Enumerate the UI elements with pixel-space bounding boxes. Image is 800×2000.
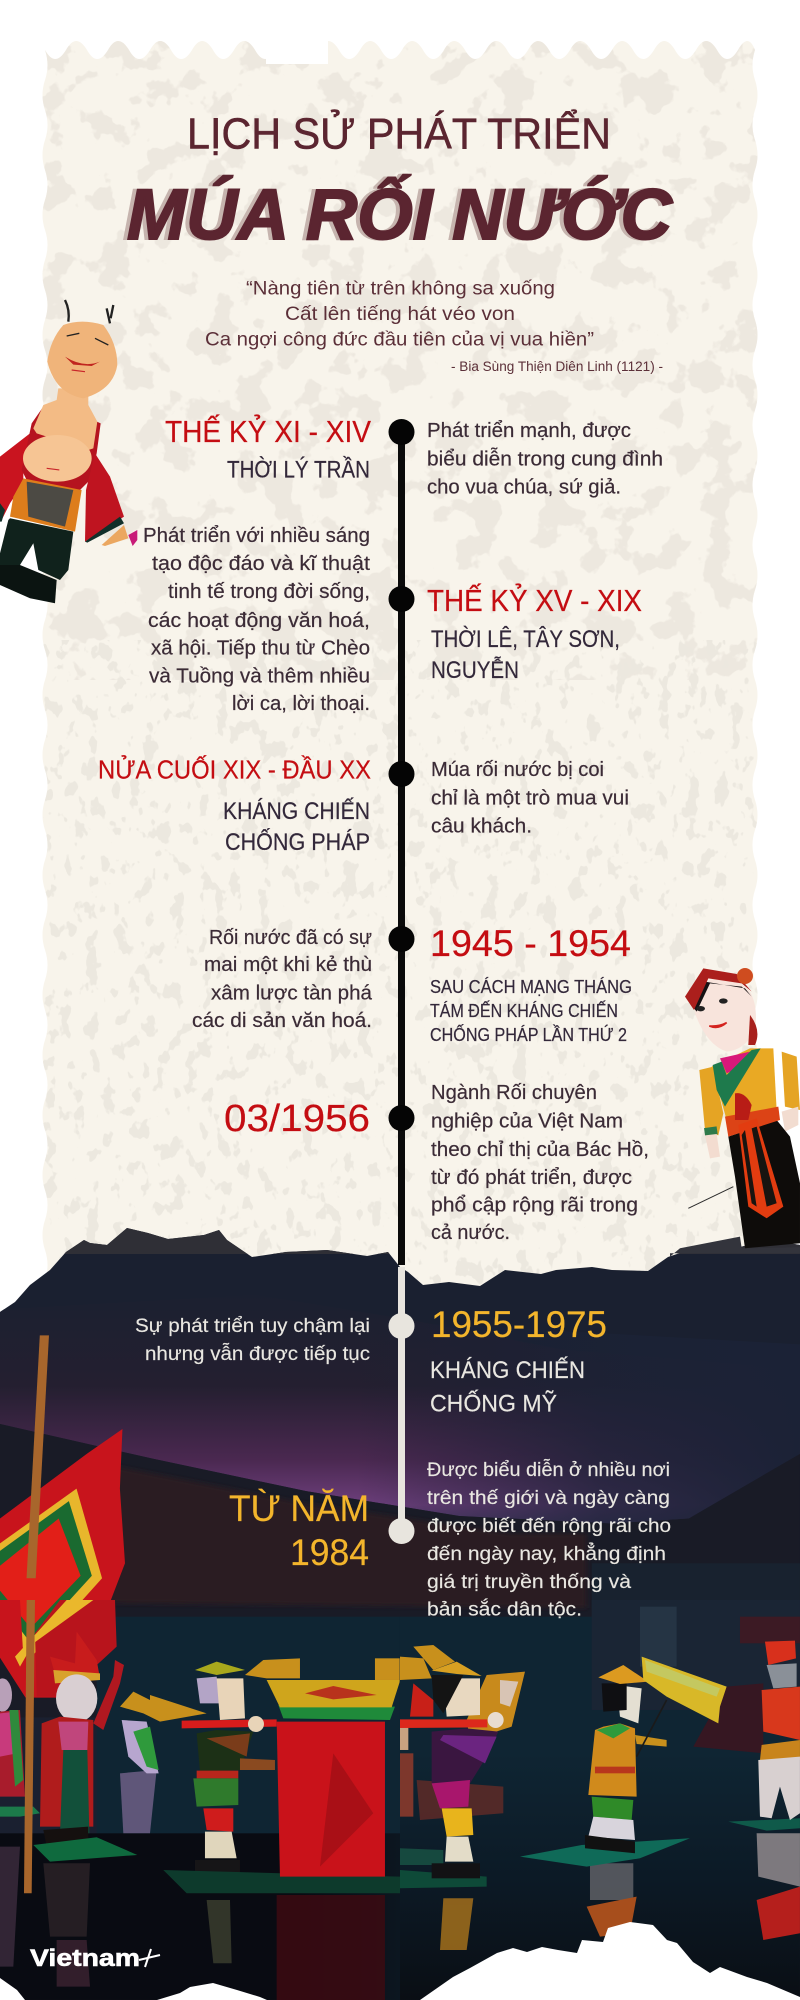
title: MÚA RỐI NƯỚC [123,175,670,255]
backdrop [400,1617,800,1760]
paper background [42,41,758,1286]
event: March 1956: theo chỉ thị của Bác Hồ, [431,1139,649,1161]
event: 15th to 19th century: tinh tế trong đời sống, [168,581,370,603]
event: from 1984 [229,1459,671,1620]
title [123,108,674,255]
backdrop [97,1617,400,1843]
event: 1945 to 1954: SAU CÁCH MẠNG THÁNG [430,977,632,997]
event: 1955 to 1975: KHÁNG CHIẾN [430,1356,585,1384]
title: MÚA RỐI NƯỚC [127,175,674,255]
event: 11th to 14th century [165,414,663,498]
puppet behind palanquin [400,1645,525,1750]
far left puppet [0,1678,40,1817]
reflections [400,1753,800,1950]
palanquin [163,1658,400,1893]
event: March 1956: Ngành Rối chuyên [431,1082,597,1104]
reflections [0,1770,385,2000]
event: from 1984: trên thế giới và ngày càng [427,1488,670,1509]
quote [205,278,663,374]
event: 15th to 19th century [143,525,642,715]
event: 15th to 19th century: THỜI LÊ, TÂY SƠN, [431,626,620,653]
event: 11th to 14th century: THẾ KỶ XI - XIV [165,414,371,449]
event: 1945 to 1954: CHỐNG PHÁP LẦN THỨ 2 [430,1024,627,1045]
event: 1945 to 1954: 1945 - 1954 [430,923,631,964]
event: 1945 to 1954 [192,923,632,1045]
event: March 1956: cả nước. [431,1222,510,1244]
event: late 19th to early 20th century: Múa rối nước bị coi [431,759,604,781]
flag lower piece and lady crown [0,1600,117,1697]
event: 15th to 19th century: NGUYỄN [431,655,519,684]
quote: Cất lên tiếng hát véo von [285,304,515,325]
event: 15th to 19th century: các hoạt động văn hoá, [148,610,370,632]
event: 1955 to 1975: nhưng vẫn được tiếp tục [145,1343,370,1365]
lady puppet [33,1632,137,1862]
event: March 1956: nghiệp của Việt Nam [431,1110,623,1132]
event: 1945 to 1954: TÁM ĐẾN KHÁNG CHIẾN [430,1000,618,1021]
event: 1945 to 1954: mai một khi kẻ thù [204,954,372,976]
event: 11th to 14th century: biểu diễn trong cung đình [427,448,663,470]
white torn edges at the bottom [0,1922,800,2000]
event: 15th to 19th century: lời ca, lời thoại. [232,693,370,715]
event: 15th to 19th century: Phát triển với nhiều sáng [143,525,370,547]
event: 1955 to 1975: CHỐNG MỸ [430,1390,557,1418]
right edge puppet [728,1641,800,1831]
logo: Vietnam+: Vietnam [30,1945,140,1972]
event: late 19th to early 20th century [98,754,629,856]
event: 15th to 19th century: THẾ KỶ XV - XIX [427,583,642,618]
event: 15th to 19th century: và Tuồng và thêm nhiều [149,666,370,688]
quote: “Nàng tiên từ trên không sa xuống [246,278,555,300]
event: 1955 to 1975: Sự phát triển tuy chậm lại [135,1316,370,1337]
grey shade under paper [745,1232,800,1254]
umbrella puppet [520,1657,727,1867]
event: late 19th to early 20th century: NỬA CUỐI XIX - ĐẦU XX [98,754,371,784]
event: 1945 to 1954: xâm lược tàn phá [211,982,373,1004]
event: 15th to 19th century: tạo độc đáo và kĩ thuật [152,553,370,575]
puppet: left man [0,300,137,603]
timeline dots [388,419,414,1544]
timeline line [398,430,405,1532]
event: 1945 to 1954: các di sản văn hoá. [192,1010,372,1032]
event: 1955 to 1975: 1955-1975 [431,1304,607,1345]
event: 11th to 14th century: cho vua chúa, sứ giả. [427,476,621,498]
puppet: right woman [670,968,800,1257]
event: March 1956 [224,1082,649,1244]
event: 11th to 14th century: THỜI LÝ TRẦN [227,456,370,484]
event: from 1984: TỪ NĂM [229,1488,369,1529]
event: late 19th to early 20th century: CHỐNG PHÁP [225,828,370,856]
dark bottom scene [0,1220,800,2000]
event: 1955 to 1975 [135,1304,607,1418]
quote: Ca ngợi công đức đầu tiên của vị vua hiền” [205,330,594,350]
roof and back wall [0,1295,800,1718]
far puppet with dragon [120,1692,207,1773]
event: from 1984: đến ngày nay, khẳng định [427,1543,666,1565]
event: 1945 to 1954: Rối nước đã có sự [209,927,372,949]
carrier puppet two [400,1662,504,1888]
quote: - Bia Sùng Thiện Diên Linh (1121) - [451,359,663,374]
event: from 1984: giá trị truyền thống và [427,1572,631,1593]
event: March 1956: từ đó phát triển, được [431,1167,632,1189]
right half of stage [400,1600,800,2000]
carrier puppet one [182,1662,277,1877]
event: 15th to 19th century: xã hội. Tiếp thu từ Chèo [151,638,370,660]
event: late 19th to early 20th century: KHÁNG CHIẾN [223,797,370,825]
event: 11th to 14th century: Phát triển mạnh, được [427,420,631,442]
event: from 1984: Được biểu diễn ở nhiều nơi [427,1459,670,1481]
event: late 19th to early 20th century: chỉ là một trò mua vui [431,788,629,810]
flag [0,1429,125,1698]
event: March 1956: phổ cập rộng rãi trong [431,1194,638,1216]
left half of stage [0,1600,400,2000]
event: March 1956: 03/1956 [224,1098,370,1140]
event: from 1984: được biết đến rộng rãi cho [427,1516,671,1537]
bamboo pole [24,1600,35,1893]
event: from 1984: 1984 [290,1532,369,1573]
event: late 19th to early 20th century: câu khách. [431,816,532,838]
title: LỊCH SỬ PHÁT TRIỂN [187,108,611,158]
event: from 1984: bản sắc dân tộc. [427,1598,582,1620]
